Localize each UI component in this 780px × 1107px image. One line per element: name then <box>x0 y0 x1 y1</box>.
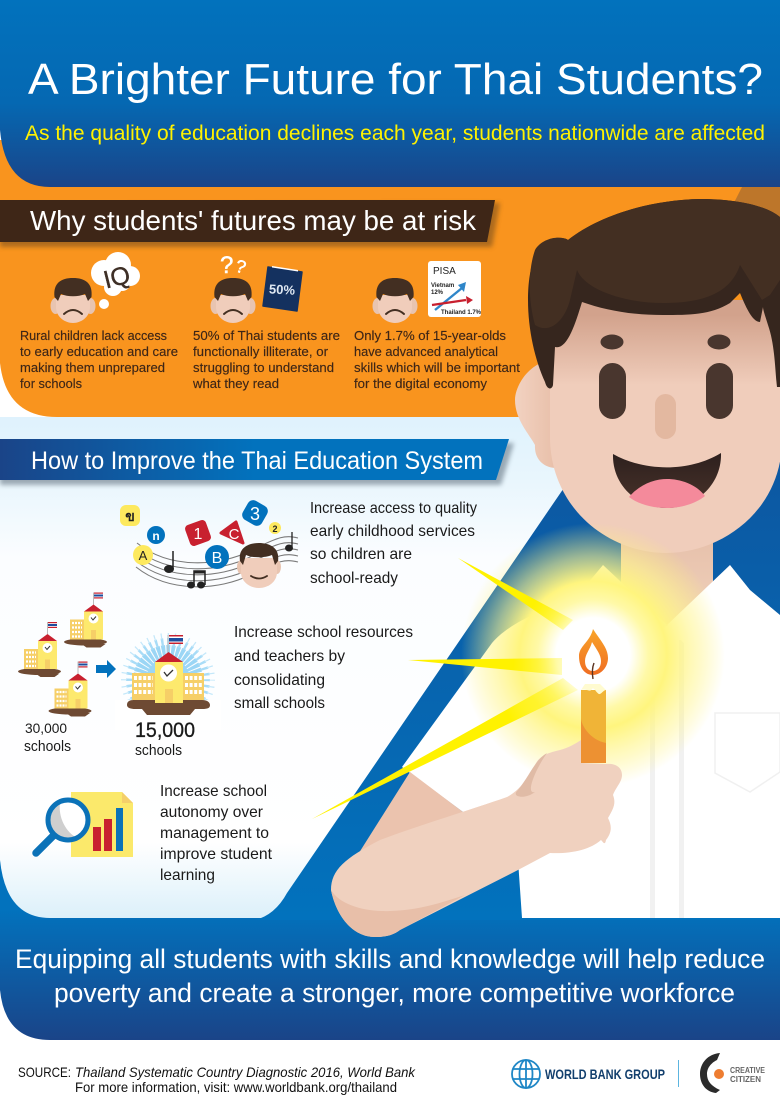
risk text 3: skills which will be important <box>354 360 520 375</box>
risk text 1: Rural children lack access <box>20 328 167 343</box>
solution 1 text: school-ready <box>310 570 398 587</box>
solution 2 text: and teachers by <box>234 648 345 665</box>
solution 3 text: learning <box>160 867 215 884</box>
logo: World Bank Group: WORLD BANK GROUP <box>545 1066 665 1082</box>
solution 3 <box>36 783 273 884</box>
eyebrows <box>600 334 730 350</box>
solution 3 text: improve student <box>160 846 273 863</box>
shadow behind the head <box>715 187 780 240</box>
icon: music staff with letters and happy child: A <box>139 548 148 563</box>
icon: music staff with letters and happy child: C <box>229 526 240 543</box>
icon: sad child with PISA chart: 12% <box>431 290 444 296</box>
shirt <box>402 590 780 918</box>
character: student holding candle <box>312 199 780 937</box>
arm <box>331 740 622 937</box>
heading: why students' futures may be at risk: Why students' futures may be at risk <box>30 205 477 236</box>
icon: large consolidated school with sunburst <box>115 635 221 730</box>
blue diagonal backdrop <box>255 460 780 920</box>
risk text 1: for schools <box>20 376 82 391</box>
icon: music staff with letters and happy child <box>120 498 298 588</box>
risk text 1 <box>20 328 178 391</box>
icon: sad child with question marks and book: ? <box>233 256 248 278</box>
heading: how to improve <box>0 439 514 485</box>
risk text 1: making them unprepared <box>20 360 165 375</box>
icon: music staff with letters and happy child: 2 <box>272 524 278 534</box>
solution 3 text: autonomy over <box>160 804 264 821</box>
hair <box>528 199 780 388</box>
icon: music staff with letters and happy child: ข <box>125 508 135 524</box>
glow <box>461 523 725 787</box>
icon: music staff with letters and happy child: 1 <box>194 526 203 543</box>
subtitle: As the quality of education declines each year, students nationwide are affected <box>25 122 765 145</box>
label: 15,000 schools: 15,000 <box>135 719 195 742</box>
label: 30,000 schools: 30,000 <box>25 720 67 736</box>
logo divider <box>678 1060 680 1087</box>
closing statement <box>15 944 765 1008</box>
arrow <box>96 660 116 678</box>
shirt pocket <box>715 713 780 792</box>
collar <box>582 565 750 650</box>
nose <box>655 394 676 439</box>
risk column 2 <box>192 252 340 391</box>
label: 30,000 schools <box>24 720 71 755</box>
risk text 1: to early education and care <box>20 344 178 359</box>
solution 3 text: Increase school <box>160 783 267 800</box>
candle <box>581 684 606 763</box>
icon: sad child with PISA chart: PISA <box>433 266 456 277</box>
solution 3 text <box>160 783 273 884</box>
solutions panel background <box>0 417 780 918</box>
solution 1 <box>120 498 477 588</box>
risk column 1 <box>20 252 178 391</box>
solution 2 text: consolidating <box>234 672 325 689</box>
eyes <box>599 363 733 419</box>
heading: how to improve: How to Improve the Thai Education System <box>31 447 483 475</box>
header band <box>0 0 780 187</box>
icon: sad child with PISA chart: Vietnam <box>431 283 454 289</box>
risk text 2: what they read <box>192 376 279 391</box>
neck <box>621 530 713 626</box>
icon: sad child with question marks and book: 50% <box>269 281 296 298</box>
source note: For more information, visit: www.worldbank.org/thailand <box>75 1079 397 1095</box>
risk text 3: for the digital economy <box>354 376 488 391</box>
label: 15,000 schools: schools <box>135 742 182 759</box>
icon: music staff with letters and happy child: B <box>212 550 222 567</box>
logo: Creative Citizen: CREATIVE <box>730 1066 766 1075</box>
icon: sad child thinking of IQ: IQ <box>101 261 133 294</box>
source note <box>18 1064 416 1095</box>
source note: SOURCE: <box>18 1064 71 1080</box>
risk text 2: functionally illiterate, or <box>193 344 329 359</box>
icon: sad child thinking of IQ <box>50 252 140 323</box>
solution 2 text <box>234 624 413 712</box>
icon: sad child with PISA chart <box>372 261 482 323</box>
heading: why students' futures may be at risk <box>0 200 500 247</box>
icon: music staff with letters and happy child: 3 <box>250 504 260 524</box>
icon: music staff with letters and happy child: n <box>152 529 160 543</box>
icon: sad child with question marks and book: ? <box>220 252 233 279</box>
title: A Brighter Future for Thai Students? <box>28 55 763 104</box>
solution 1 text: early childhood services <box>310 523 475 540</box>
closing statement: poverty and create a stronger, more competitive workforce <box>54 978 735 1008</box>
label: 15,000 schools <box>135 719 195 759</box>
risk text 3: Only 1.7% of 15-year-olds <box>354 328 507 343</box>
risk column 3 <box>354 261 520 391</box>
risk text 3 <box>354 328 520 391</box>
icon: three small schools <box>18 592 107 716</box>
shirt placket <box>650 640 684 918</box>
orange risk panel <box>0 140 780 417</box>
solution 2 <box>18 592 413 759</box>
closing statement: Equipping all students with skills and knowledge will help reduce <box>15 944 765 974</box>
icon: sad child with PISA chart: Thailand 1.7% <box>441 310 482 316</box>
face <box>550 300 780 553</box>
icon: sad child with question marks and book <box>210 252 302 323</box>
risk text 2: 50% of Thai students are <box>193 328 340 343</box>
icon: magnifier over chart document <box>36 792 133 857</box>
light rays <box>312 558 578 819</box>
flame <box>579 629 608 679</box>
logo: Creative Citizen: CITIZEN <box>730 1075 761 1084</box>
logo: World Bank Group <box>512 1060 665 1088</box>
mouth <box>613 453 721 508</box>
source note: Thailand Systematic Country Diagnostic 2016, World Bank <box>75 1064 416 1080</box>
solution 1 text <box>310 500 477 587</box>
solution 1 text: so children are <box>310 546 412 563</box>
solution 2 text: Increase school resources <box>234 624 413 641</box>
ear <box>515 360 556 468</box>
risk text 3: have advanced analytical <box>354 344 498 359</box>
bottom band backing <box>0 850 780 1040</box>
risk text 2: struggling to understand <box>193 360 334 375</box>
logo: Creative Citizen <box>700 1053 766 1093</box>
solution 2 text: small schools <box>234 695 325 712</box>
solution 3 text: management to <box>160 825 269 842</box>
risk text 2 <box>192 328 340 391</box>
solution 1 text: Increase access to quality <box>310 500 477 517</box>
label: 30,000 schools: schools <box>24 738 71 755</box>
